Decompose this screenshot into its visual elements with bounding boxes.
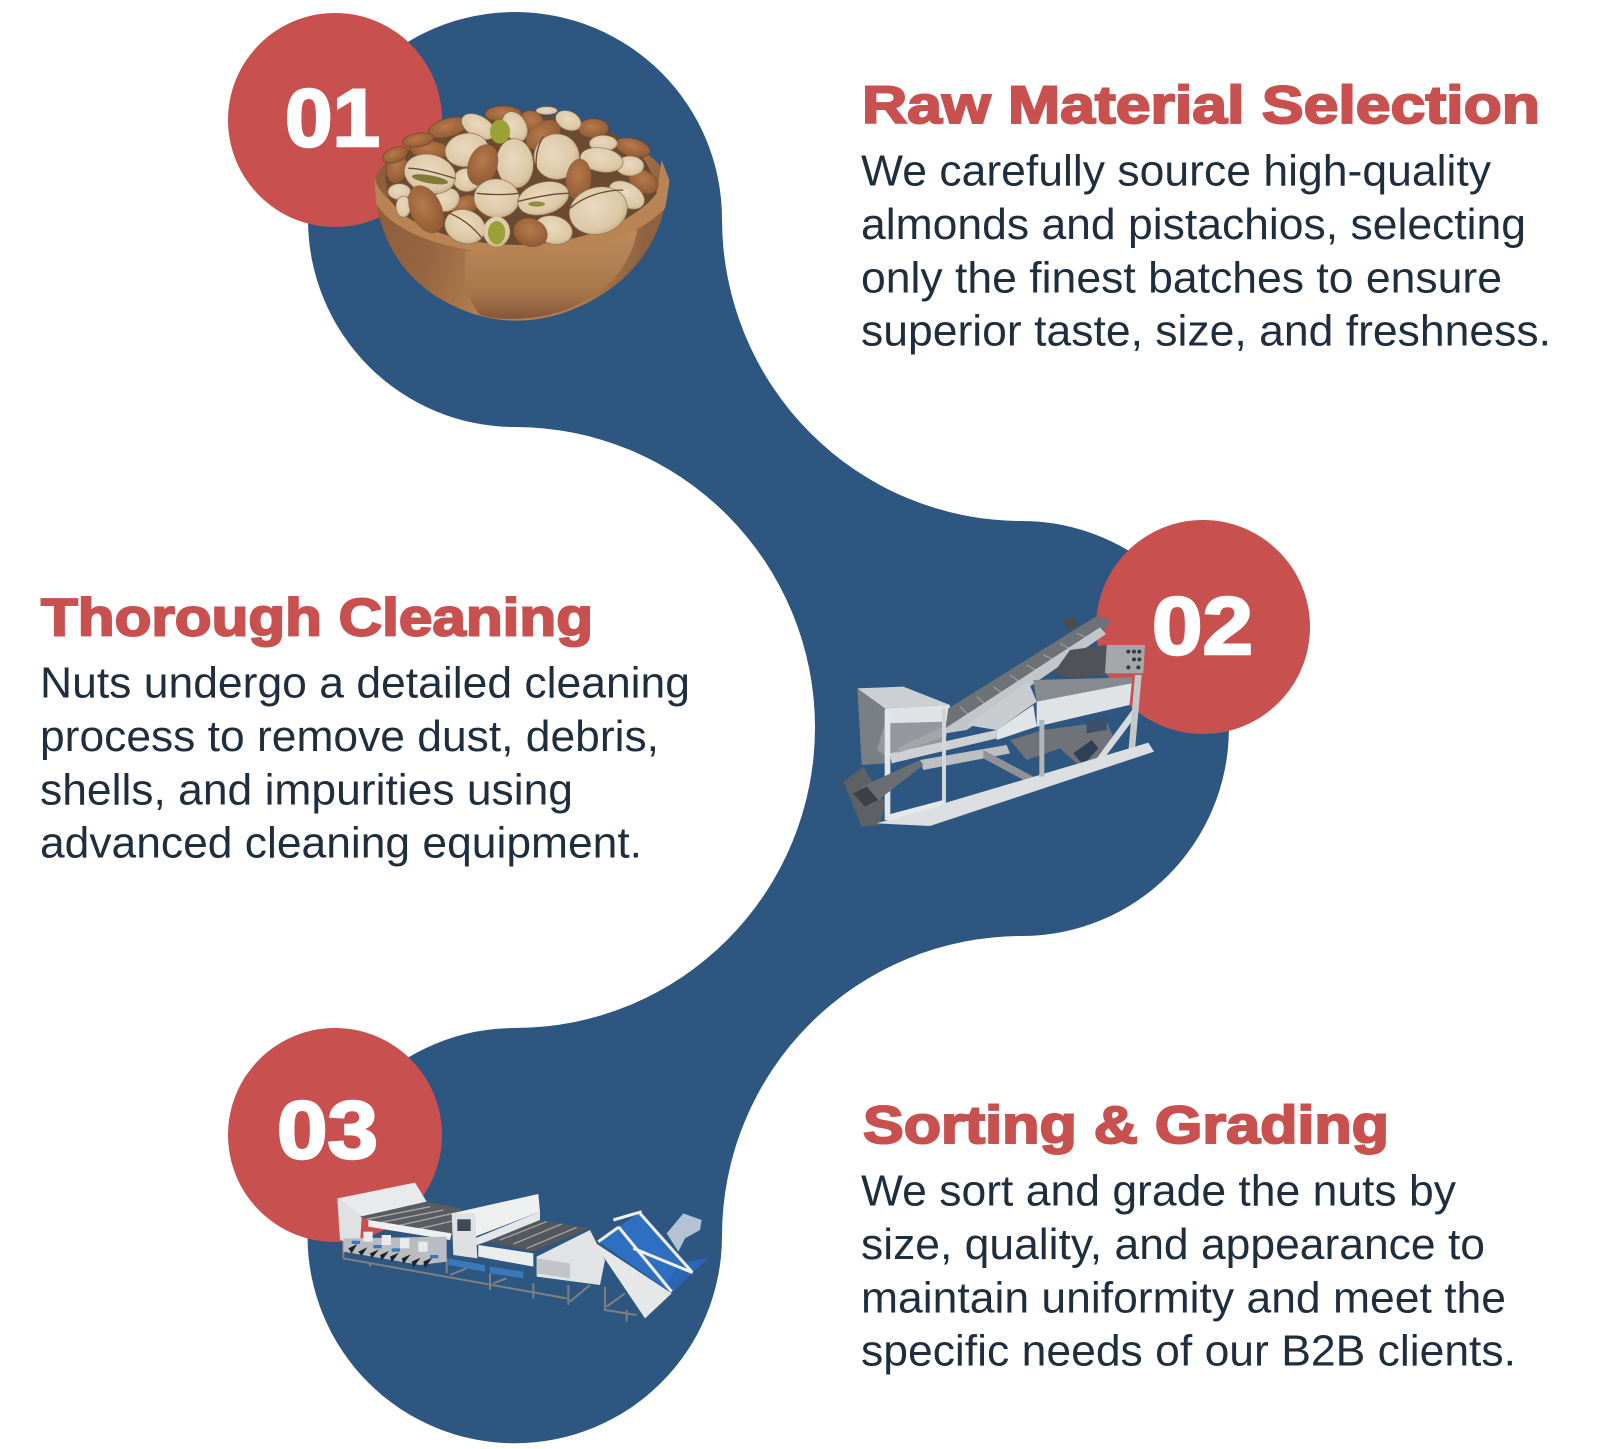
icon: optical sorting and grading line <box>337 1183 708 1322</box>
text block: raw material selection <box>861 146 1551 356</box>
blue connected blob <box>308 12 1229 1443</box>
badge circle 01 <box>228 13 442 227</box>
text block: sorting and grading: We sort and grade the nuts by <box>861 1166 1456 1216</box>
text block: thorough cleaning: Nuts undergo a detailed cleaning <box>40 658 690 708</box>
number 02: 02 <box>1152 581 1253 672</box>
text block: raw material selection: only the finest batches to ensure <box>861 254 1502 302</box>
text block: thorough cleaning: advanced cleaning equipment. <box>40 818 642 868</box>
text block: thorough cleaning <box>40 658 690 868</box>
text block: sorting and grading <box>861 1166 1516 1376</box>
text block: sorting and grading: maintain uniformity and meet the <box>861 1274 1506 1322</box>
heading: Raw Material Selection: Raw Material Selection <box>862 76 1540 135</box>
badge circle 02 <box>1096 520 1310 734</box>
text block: sorting and grading: specific needs of our B2B clients. <box>861 1326 1516 1376</box>
text block: thorough cleaning: process to remove dust, debris, <box>40 712 659 761</box>
badge circle 03 <box>228 1028 442 1242</box>
heading: Thorough Cleaning: Thorough Cleaning <box>41 588 593 648</box>
text block: raw material selection: almonds and pistachios, selecting <box>861 200 1526 249</box>
text block: raw material selection: We carefully source high-quality <box>861 146 1491 196</box>
text block: thorough cleaning: shells, and impurities using <box>40 766 573 814</box>
text block: raw material selection: superior taste, size, and freshness. <box>861 306 1551 356</box>
icon: wooden bowl of almonds and pistachios <box>374 106 669 321</box>
number 03: 03 <box>277 1085 378 1176</box>
text block: sorting and grading: size, quality, and appearance to <box>861 1220 1485 1269</box>
heading: Sorting & Grading: Sorting & Grading <box>863 1096 1389 1155</box>
number 01: 01 <box>285 73 380 164</box>
icon: inclined conveyor cleaning machine <box>843 616 1154 827</box>
